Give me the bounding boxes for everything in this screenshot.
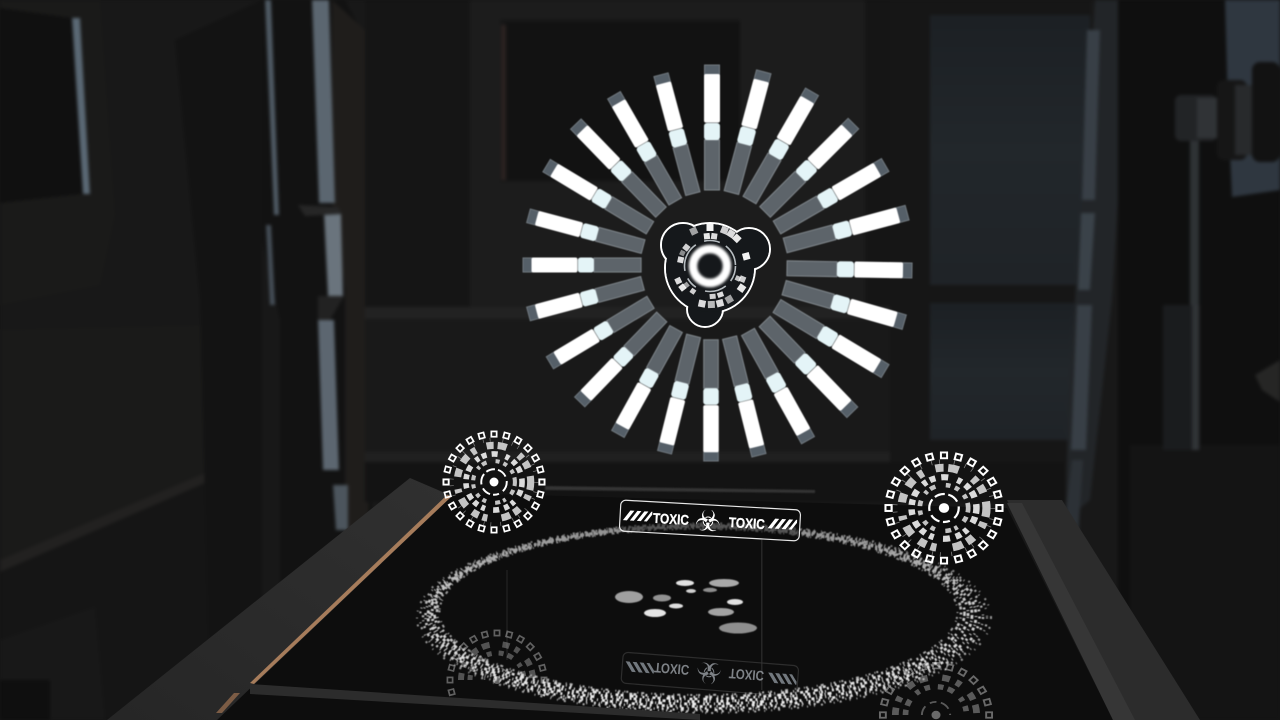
particle ring <box>417 523 991 713</box>
lobed outline <box>661 223 770 327</box>
back panel with window <box>365 0 1065 502</box>
radial gauge with 24 spokes <box>523 65 912 461</box>
central emblem <box>661 223 770 327</box>
reflection: left disc <box>447 630 547 695</box>
reflection: toxic sign <box>621 649 799 697</box>
right machinery <box>1118 0 1280 720</box>
table <box>107 478 1200 720</box>
pillar <box>262 0 372 720</box>
right label: TOXIC <box>728 514 765 532</box>
dark column <box>175 0 262 700</box>
small radial disc: left <box>443 431 545 533</box>
sign frame <box>619 500 801 541</box>
left table frame <box>107 478 452 720</box>
center glow ring <box>693 249 727 283</box>
reflection: toxic sign: TOXIC <box>654 660 690 678</box>
toxic sign <box>619 499 801 543</box>
right hazard stripes <box>768 518 797 530</box>
reflection: right disc <box>880 663 992 719</box>
left wall panel <box>0 0 212 720</box>
icon: biohazard: ☣ <box>694 503 722 539</box>
floating blobs <box>615 579 757 634</box>
thin arc ring <box>684 240 736 292</box>
left hazard stripes <box>623 510 652 522</box>
crossbar of table <box>250 684 700 720</box>
outline interior mask <box>662 224 769 326</box>
right frame bevel <box>1007 503 1135 720</box>
table surface <box>217 493 1113 720</box>
back edge highlight <box>545 486 815 493</box>
right blue panels <box>890 0 1130 540</box>
reflection: toxic sign: TOXIC <box>728 665 765 684</box>
left label: TOXIC <box>653 510 689 528</box>
small radial disc: right <box>885 452 1003 564</box>
right table frame <box>1007 500 1200 720</box>
data squares ring <box>674 224 751 308</box>
reflection: toxic sign: ☣ <box>695 655 723 691</box>
copper edge strip <box>216 495 452 713</box>
